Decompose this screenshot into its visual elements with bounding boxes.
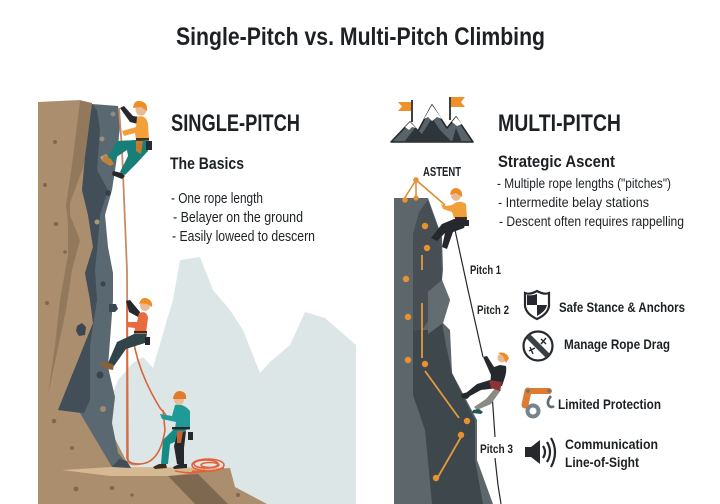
anchor system xyxy=(402,177,445,205)
icon: speaker xyxy=(525,438,555,467)
climber: middle xyxy=(99,298,152,370)
icon: cam and hook xyxy=(525,389,554,416)
text block: single-pitch bullets: - One rope length xyxy=(171,191,263,207)
text block: single-pitch bullets xyxy=(171,191,315,245)
label: Limited Protection xyxy=(558,396,661,412)
label: ascent: ASTENT xyxy=(423,165,461,179)
ledge xyxy=(62,467,230,476)
text block: single-pitch bullets: - Easily loweed to descern xyxy=(172,229,315,245)
item: safe stance and anchors xyxy=(525,291,685,319)
text block: multi-pitch bullets: - Multiple rope lengths ("pitches") xyxy=(497,175,671,191)
item: communication line-of-sight: Line-of-Sight xyxy=(565,454,639,470)
icon: prohibited rope xyxy=(524,332,552,360)
subheading: the basics: The Basics xyxy=(170,154,244,173)
rock wall xyxy=(394,198,493,504)
rock holds xyxy=(43,112,240,497)
heading: multi-pitch: MULTI-PITCH xyxy=(498,110,621,137)
climber: middle xyxy=(461,353,509,414)
pitch labels: Pitch 1 xyxy=(470,263,501,277)
lead rope xyxy=(455,230,501,504)
background mountains xyxy=(112,257,356,504)
title: Single-Pitch vs. Multi-Pitch Climbing xyxy=(176,23,545,51)
text block: single-pitch bullets: - Belayer on the ground xyxy=(173,210,303,226)
panel: multi-pitch illustration: Pitch 2 xyxy=(477,303,509,317)
icon: shield xyxy=(525,291,549,319)
rock wall: slate face xyxy=(58,104,130,467)
item: communication line-of-sight xyxy=(525,436,658,470)
climber: top xyxy=(431,188,469,249)
item: limited protection xyxy=(525,389,661,416)
panel: single-pitch illustration xyxy=(38,100,356,504)
label: Manage Rope Drag xyxy=(564,336,670,352)
text block: multi-pitch bullets: - Descent often requires rappelling xyxy=(499,213,684,229)
item: manage rope drag xyxy=(524,332,670,360)
text block: multi-pitch bullets xyxy=(497,175,684,229)
heading: single-pitch: SINGLE-PITCH xyxy=(171,110,300,137)
belayer xyxy=(153,391,193,469)
rock wall: tan xyxy=(38,100,267,504)
icon: mountains with flags xyxy=(391,97,473,142)
panel: multi-pitch illustration xyxy=(394,165,513,504)
ropes xyxy=(119,108,140,464)
rope coil xyxy=(175,459,224,473)
text block: multi-pitch bullets: - Intermedite belay stations xyxy=(498,194,649,210)
climber: top xyxy=(102,101,152,179)
panel: multi-pitch illustration: Pitch 3 xyxy=(480,442,513,456)
label: Communication xyxy=(565,436,658,452)
label: Safe Stance & Anchors xyxy=(559,299,685,315)
orange holds and routes xyxy=(403,223,470,481)
subheading: strategic ascent: Strategic Ascent xyxy=(498,152,615,171)
